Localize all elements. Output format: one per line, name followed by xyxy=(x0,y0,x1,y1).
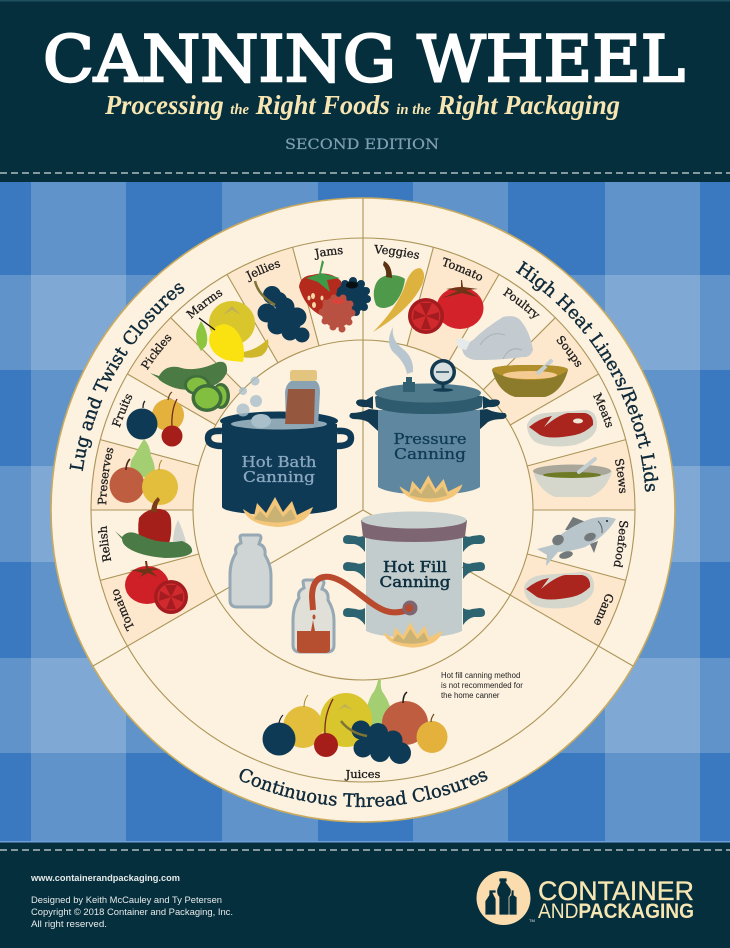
pot label: Canning xyxy=(380,575,450,591)
icon: juice fruit xyxy=(262,680,448,764)
logo xyxy=(476,871,694,925)
section label: Continuous Thread Closures: Continuous Thread Closures xyxy=(240,768,488,808)
pot label xyxy=(380,560,450,591)
logo: ANDPACKAGING xyxy=(538,900,694,923)
food labels: Jams xyxy=(314,248,343,260)
food labels: Soups xyxy=(556,336,582,367)
website: www.containerandpackaging.com xyxy=(30,873,180,883)
section label: High Heat Liners/Retort Lids: High Heat Liners/Retort Lids xyxy=(516,260,658,492)
food labels: Relish xyxy=(98,526,112,562)
bubbles xyxy=(236,376,262,416)
footer band xyxy=(0,841,730,948)
pot label: Hot Fill xyxy=(383,560,447,576)
flame xyxy=(383,622,443,648)
credits: Copyright © 2018 Container and Packaging, Inc. xyxy=(31,907,233,917)
filling jar xyxy=(293,580,334,653)
icon: preserves fruit xyxy=(110,439,178,505)
handles xyxy=(208,431,351,446)
food labels: Meats xyxy=(593,392,612,428)
food labels: Preserves xyxy=(98,448,114,505)
food labels: Tomato xyxy=(443,257,482,281)
icon: jam berries xyxy=(299,260,371,332)
food labels: Juices xyxy=(345,767,381,781)
pot label: Pressure xyxy=(394,432,466,448)
subtitle: Processing the Right Foods in the Right Packaging xyxy=(104,90,620,120)
pressure canner xyxy=(349,327,507,502)
steam xyxy=(389,327,413,374)
food labels: Jellies xyxy=(246,261,280,282)
handles xyxy=(349,396,507,431)
icon: poultry xyxy=(456,316,533,360)
section label: Lug and Twist Closures: Lug and Twist Closures xyxy=(70,283,184,472)
credits: Designed by Keith McCauley and Ty Petersen xyxy=(31,895,222,905)
pot label: Canning xyxy=(394,447,466,463)
pot label: Hot Bath xyxy=(242,455,316,471)
icon: cucumbers (pickles) xyxy=(150,362,230,412)
food labels: Seafood xyxy=(614,521,628,568)
logo: CONTAINER xyxy=(538,876,694,906)
food labels: Stews xyxy=(615,458,626,494)
food labels: Game xyxy=(594,594,614,625)
plaid background xyxy=(0,182,730,842)
empty jar xyxy=(230,535,271,607)
food labels: Veggies xyxy=(374,244,420,259)
credits xyxy=(31,895,233,929)
food labels: Pickles xyxy=(140,334,172,370)
icon: soup bowl xyxy=(492,361,568,397)
note: hot fill warning: Hot fill canning method xyxy=(441,671,520,680)
jar xyxy=(285,370,320,426)
icon: tomato (right) xyxy=(408,280,484,334)
food labels xyxy=(98,244,628,781)
credits: All right reserved. xyxy=(31,919,107,929)
icon: fish xyxy=(537,517,616,566)
food labels: Tomato xyxy=(113,589,134,632)
icon: game meat xyxy=(524,572,594,608)
flame xyxy=(243,497,313,527)
hose xyxy=(312,577,408,612)
note: hot fill warning: is not recommended for xyxy=(441,681,523,690)
handles xyxy=(343,535,485,625)
note: hot fill warning: the home canner xyxy=(441,691,500,700)
hot fill canner xyxy=(230,512,485,653)
icon: vegetables xyxy=(373,261,424,332)
wheel xyxy=(51,198,675,822)
icon: grapes (jellies) xyxy=(255,281,310,342)
icon: tomato (left) xyxy=(125,561,188,614)
logo: TM xyxy=(529,918,535,923)
pot label xyxy=(394,432,466,463)
food labels: Fruits xyxy=(112,394,132,428)
title: CANNING WHEEL xyxy=(43,23,685,97)
icon: meat xyxy=(527,410,597,446)
header band xyxy=(0,0,730,182)
pot label: Canning xyxy=(243,470,315,486)
food labels: Poultry xyxy=(502,287,540,319)
pressure gauge xyxy=(430,359,456,392)
flame xyxy=(400,475,462,502)
note: hot fill warning xyxy=(441,671,523,700)
icon: citrus (marms) xyxy=(196,301,268,362)
food labels: Marms xyxy=(186,290,222,319)
ring segments xyxy=(91,247,635,646)
hot bath pot xyxy=(208,370,351,527)
icon: fruits xyxy=(126,392,184,446)
icon: stew bowl xyxy=(533,459,612,497)
icon: relish vegetables xyxy=(115,497,192,558)
edition: SECOND EDITION xyxy=(285,137,439,153)
pot label xyxy=(242,455,316,486)
